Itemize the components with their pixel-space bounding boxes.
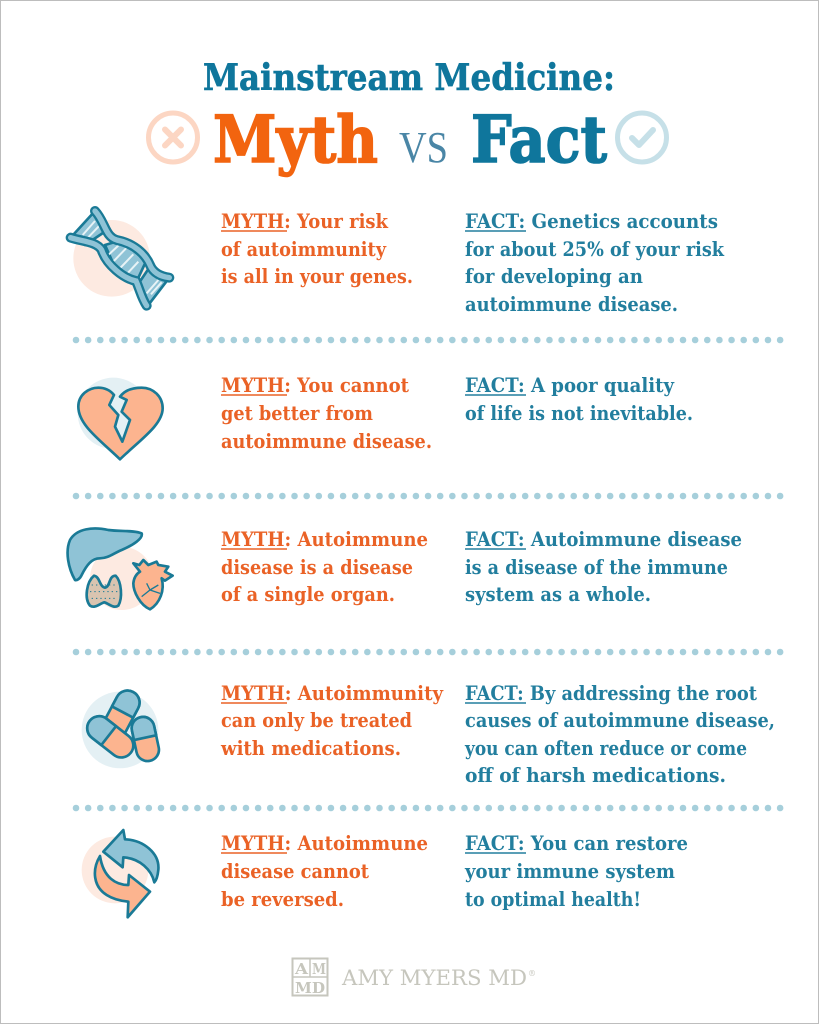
panel: myth 2 [221,373,432,453]
panel: myth 1 [221,209,413,288]
panel: fact 3: FACT: Autoimmune disease [465,527,742,551]
panel: myth 5: MYTH: Autoimmune [221,831,428,855]
panel: myth 5: be reversed. [221,887,344,911]
panel: myth 5: disease cannot [221,859,370,883]
logo wordmark: AMY MYERS MD [341,966,527,990]
panel: myth 4: can only be treated [221,708,412,732]
panel: myth 3: MYTH: Autoimmune [221,527,428,551]
panel: myth 5 [221,831,428,911]
panel: fact 5 [464,831,688,911]
panel: fact 3 [465,527,742,606]
panel: fact 2 [465,373,693,425]
panel: fact 1: for developing an [465,264,643,288]
heading: vs: VS [399,123,448,172]
panel: fact 1: FACT: Genetics accounts [465,209,718,233]
panel: myth 4 [220,681,444,760]
panel: myth 1: is all in your genes. [221,264,413,288]
icon: x circle [148,113,198,162]
logo mark: A [294,960,308,978]
title: Mainstream Medicine: Mainstream Medicine: [203,57,615,99]
panel: fact 5: your immune system [464,859,675,883]
panel: myth 2: get better from [221,401,373,425]
logo mark [292,958,328,997]
panel: fact 1: for about 25% of your risk [465,237,725,261]
heading: Fact: Fact [471,102,607,178]
panel: myth 3: disease is a disease [221,555,413,579]
panel: myth 1: of autoimmunity [221,237,387,261]
panel: fact 2: FACT: A poor quality [465,373,675,397]
icon: circular arrows [82,830,158,917]
panel: fact 4: off of harsh medications. [465,763,726,787]
panel: fact 5: to optimal health! [465,887,641,911]
icon: DNA helix [71,211,169,306]
panel: myth 2: MYTH: You cannot [221,373,410,397]
panel: myth 3 [221,527,428,606]
panel: fact 4: causes of autoimmune disease, [465,708,775,732]
registered mark: ® [528,969,536,978]
panel: fact 4 [464,681,775,787]
panel: fact 2: of life is not inevitable. [465,401,693,425]
icon: liver, thyroid and heart organs [68,528,173,610]
panel: myth 2: autoimmune disease. [221,429,432,453]
panel: myth 1: MYTH: Your risk [221,209,389,233]
icon: check circle [618,113,666,162]
logo mark: M [312,960,326,978]
icon: pills [82,686,161,768]
logo mark: MD [295,979,325,997]
panel: myth 3: of a single organ. [221,582,395,606]
panel: fact 5: FACT: You can restore [465,831,688,855]
icon: broken heart [78,378,163,459]
panel: fact 3: system as a whole. [465,582,651,606]
panel: fact 4: you can often reduce or come [464,736,747,760]
heading: Myth: Myth [213,102,378,178]
logo: AMY MYERS MD [292,958,536,997]
panel: fact 4: FACT: By addressing the root [465,681,758,705]
panel: fact 3: is a disease of the immune [465,555,728,579]
panel: fact 1 [465,209,725,316]
panel: fact 1: autoimmune disease. [465,292,678,316]
panel: myth 4: MYTH: Autoimmunity [221,681,444,705]
panel: myth 4: with medications. [220,736,401,760]
